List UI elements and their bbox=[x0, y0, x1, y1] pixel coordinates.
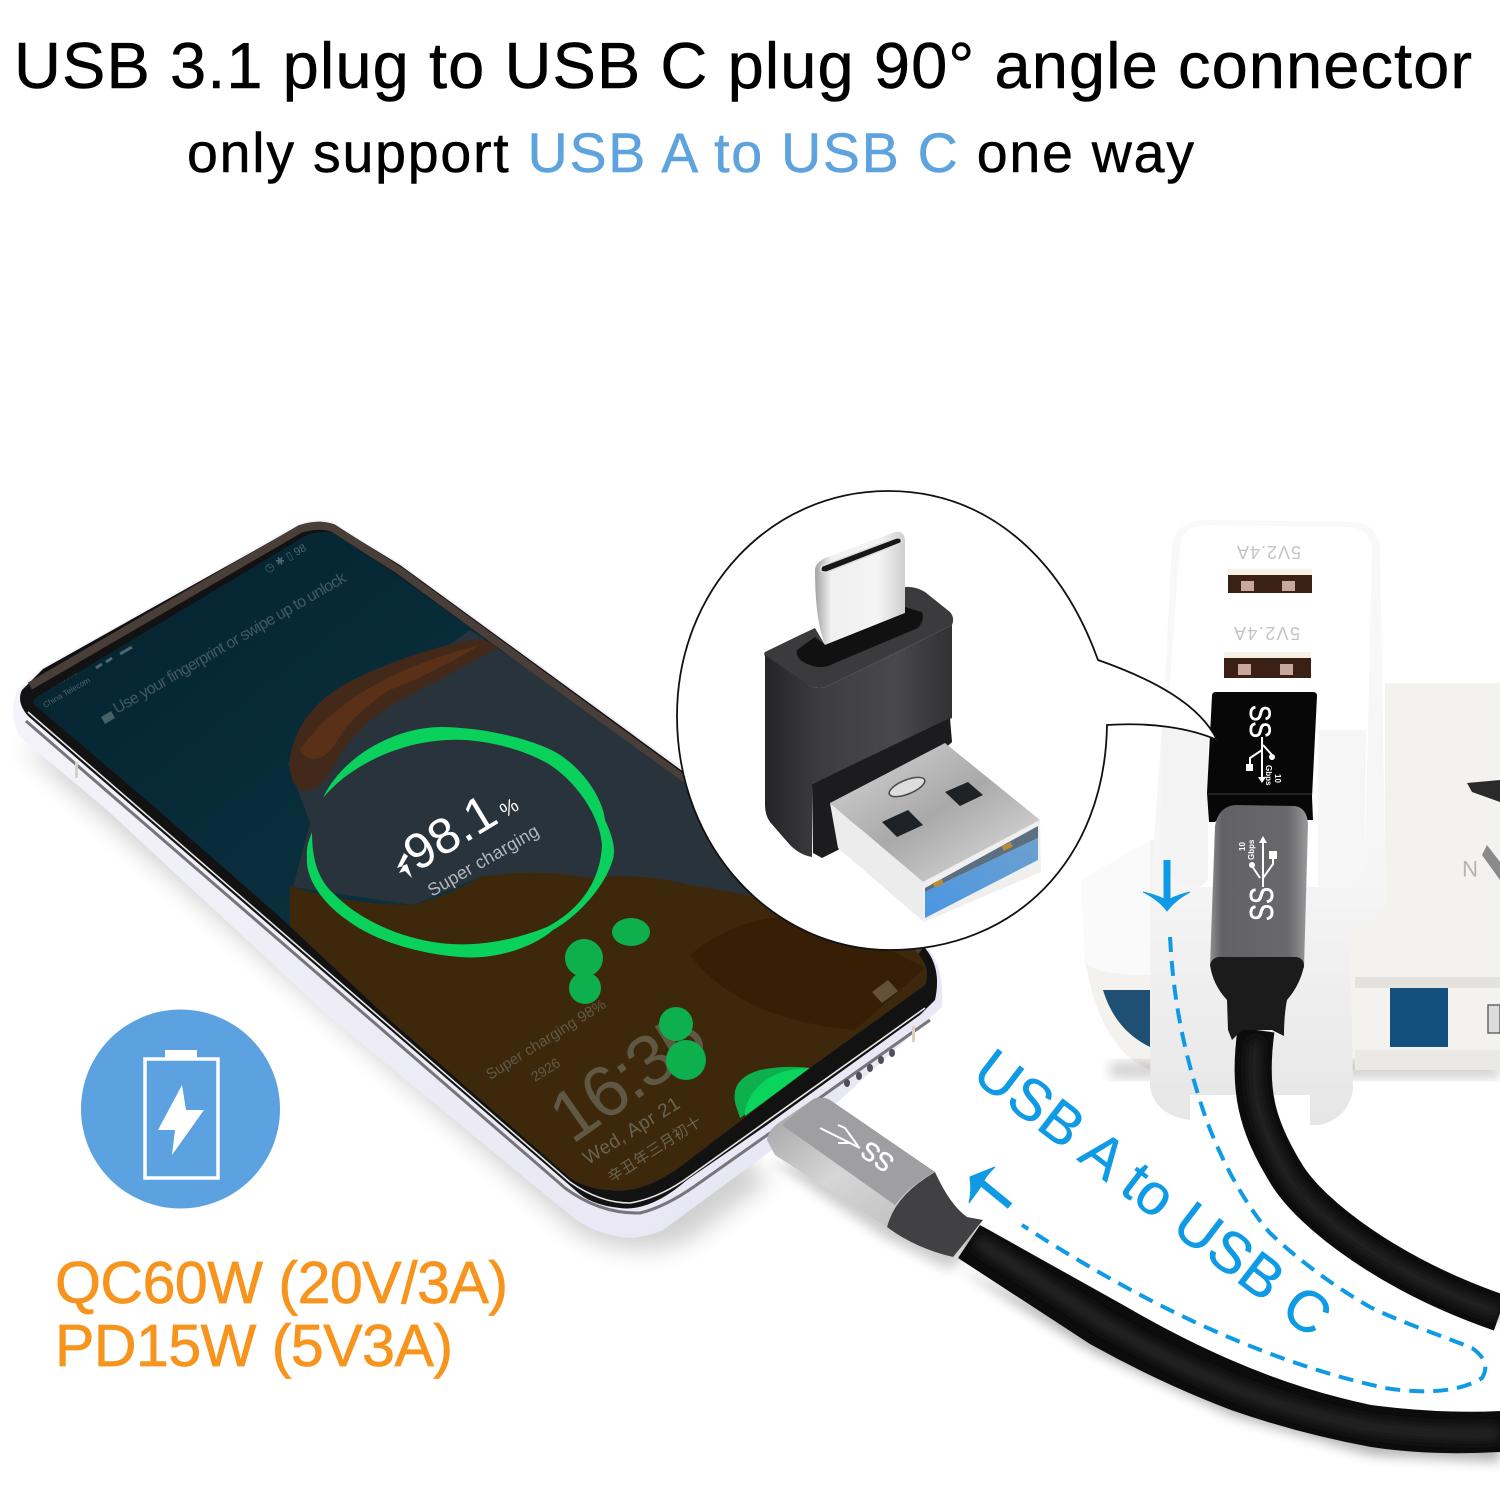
signal icons bbox=[96, 647, 132, 668]
phone shadow bbox=[20, 745, 770, 1250]
arrow: left bbox=[969, 1167, 1010, 1206]
usb a blue tongue bbox=[925, 838, 1038, 918]
bezel edge grey band bbox=[26, 721, 930, 1213]
camera icon bbox=[872, 980, 898, 1003]
port label 1: 5V2.4A bbox=[1237, 542, 1301, 562]
metal shell bbox=[767, 1098, 935, 1227]
charging code: 2926 bbox=[528, 1054, 563, 1085]
grey plug shell bbox=[1210, 805, 1308, 968]
charge percent: 98.1 bbox=[394, 783, 506, 881]
battery badge bbox=[81, 1010, 280, 1208]
usb a front rim bbox=[923, 820, 1041, 922]
shell top face bbox=[782, 1098, 935, 1205]
lock icon bbox=[101, 711, 115, 724]
power spec QC: QC60W (20V/3A) bbox=[55, 1250, 508, 1316]
USB port 2 bbox=[1224, 652, 1311, 678]
lower cable body bbox=[958, 1225, 1500, 1453]
bezel top glass edge bbox=[30, 526, 920, 952]
battery cap bbox=[165, 1050, 197, 1060]
flow label: USB A to USB C bbox=[962, 1037, 1343, 1349]
status icons: ◷ ✱ ▯ 98 bbox=[262, 542, 309, 576]
bezel edge highlight bbox=[28, 712, 925, 1203]
usb a opening shadow bbox=[925, 826, 1038, 892]
black adapter ten: 10 bbox=[1273, 774, 1282, 783]
usb a oval bbox=[887, 773, 927, 801]
speaker holes bbox=[844, 1049, 895, 1087]
white charger block bbox=[1150, 520, 1386, 1125]
callout bubble bbox=[677, 491, 1217, 950]
adapter body bbox=[765, 625, 952, 857]
usb a metal top bbox=[830, 743, 1040, 882]
green blob bbox=[734, 1067, 810, 1118]
black adapter SS: SS bbox=[1243, 705, 1276, 738]
gold pins bbox=[933, 879, 944, 888]
phone bezel bbox=[20, 522, 937, 1208]
usb a metal side bbox=[830, 803, 924, 922]
usb trident logo bbox=[820, 1125, 860, 1148]
battery outline bbox=[145, 1059, 218, 1178]
phone bbox=[0, 500, 960, 1260]
charging note: Super charging 98% bbox=[483, 996, 609, 1083]
lightning bolt bbox=[158, 1085, 204, 1155]
lower cable sheen bbox=[975, 1240, 1500, 1434]
black adapter trident bbox=[1246, 737, 1275, 783]
grey plug SS: SS bbox=[1243, 887, 1280, 921]
badge circle bbox=[81, 1010, 280, 1208]
lock screen hint: Use your fingerprint or swipe up to unlock bbox=[110, 569, 350, 717]
wall socket bbox=[1081, 683, 1500, 1078]
wall socket: N bbox=[1462, 856, 1478, 881]
lower cable bbox=[958, 1225, 1500, 1462]
adapter top face bbox=[764, 587, 953, 688]
black adapter band bbox=[1208, 793, 1312, 795]
lower cable shadow bbox=[958, 1268, 1500, 1462]
strain relief bbox=[887, 1172, 983, 1257]
charge dots bbox=[565, 918, 706, 1080]
flow dashed path bbox=[1022, 937, 1485, 1391]
magnifier callout bbox=[677, 491, 1217, 950]
status carrier 2: China Telecom bbox=[42, 675, 92, 710]
usb a to c adapter and plug at charger bbox=[1207, 692, 1317, 1040]
grey plug speed: Gbps bbox=[1247, 839, 1256, 860]
percent sign: % bbox=[496, 794, 523, 822]
usb c metal tongue bbox=[815, 532, 905, 645]
charger and wall socket photo bbox=[1081, 520, 1500, 1125]
usb c collar bbox=[797, 607, 923, 667]
upper cable bbox=[1253, 1030, 1500, 1313]
arrow: down bbox=[1143, 860, 1190, 911]
USB port 1 bbox=[1228, 569, 1312, 593]
strain relief bbox=[1210, 957, 1304, 1040]
phone screen wallpaper bbox=[34, 532, 927, 1191]
status carrier 1: China Mobile bbox=[34, 667, 79, 699]
port label 2: 5V2.4A bbox=[1234, 623, 1300, 643]
lunar date: 辛丑年三月初十 bbox=[605, 1113, 705, 1186]
phone body bbox=[13, 520, 942, 1238]
subtitle: one way support: only support USB A to USB C one way bbox=[187, 122, 1194, 184]
black adapter speed: Gbps bbox=[1264, 765, 1273, 786]
usb c plug in phone bbox=[767, 1098, 985, 1270]
title: USB 3.1 plug to USB C plug 90° angle connector bbox=[14, 29, 1472, 102]
side tab right bbox=[912, 1026, 915, 1042]
grey plug trident bbox=[1249, 836, 1277, 887]
charging label: Super charging bbox=[424, 821, 542, 900]
power spec PD: PD15W (5V3A) bbox=[55, 1313, 453, 1379]
lock clock: 16:35 bbox=[535, 995, 720, 1158]
small bolt bbox=[397, 853, 412, 878]
grey plug ten: 10 bbox=[1238, 842, 1247, 851]
SS logo: SS bbox=[855, 1135, 899, 1179]
usb a slots bbox=[882, 782, 983, 837]
upper cable sheen bbox=[1254, 1040, 1500, 1313]
black adapter bbox=[1207, 692, 1317, 822]
lock date: Wed, Apr 21 bbox=[580, 1093, 684, 1169]
adapter illustration bbox=[764, 532, 1041, 922]
side tab left bbox=[75, 762, 78, 778]
charge ring bbox=[307, 727, 614, 958]
usb c opening bbox=[821, 538, 901, 572]
connector shadow bbox=[770, 1160, 985, 1270]
usb a collar bbox=[812, 718, 952, 858]
